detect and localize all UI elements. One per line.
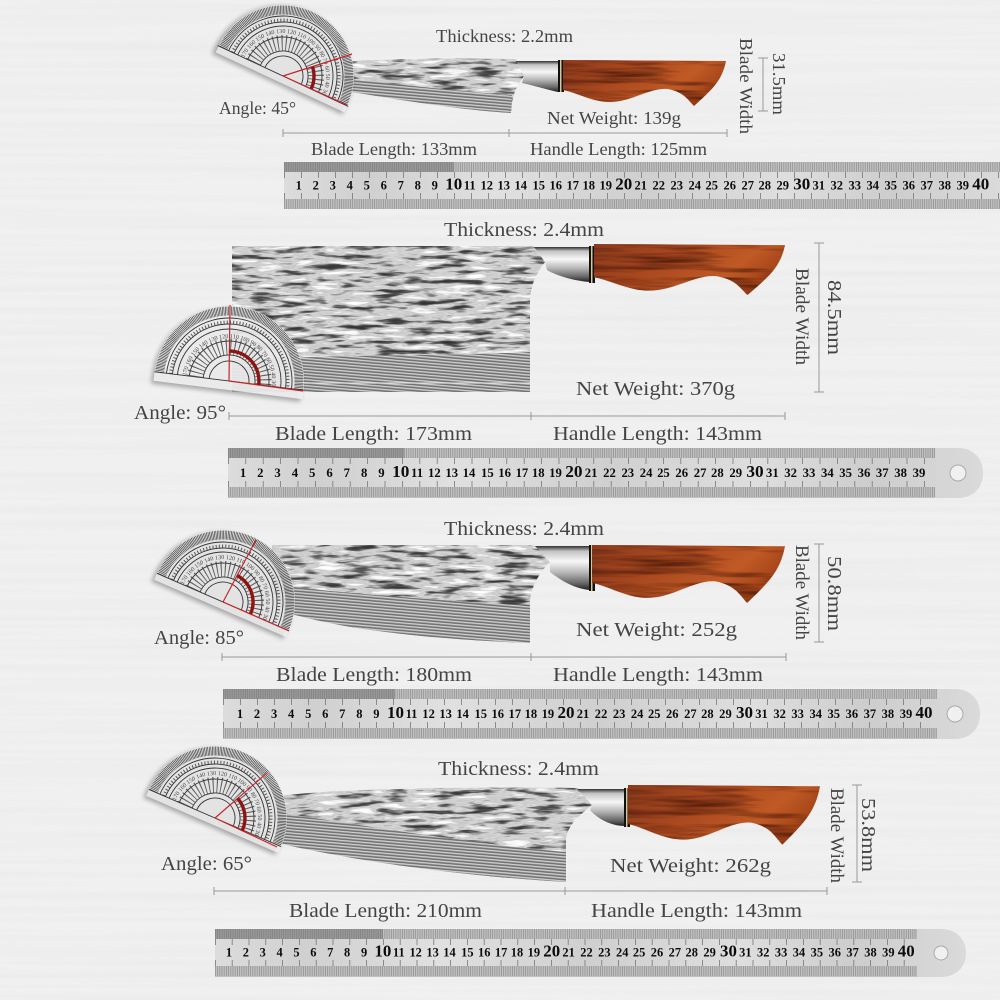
ruler 2: 5 bbox=[309, 466, 315, 480]
width value 1: 31.5mm bbox=[769, 53, 789, 115]
ruler 2: 10 bbox=[392, 462, 409, 481]
knife 3 handle bbox=[592, 545, 785, 603]
knife 2 bolster bbox=[534, 247, 590, 282]
width bracket 3 bbox=[814, 544, 824, 642]
ruler 4: 20 bbox=[543, 941, 560, 961]
ruler 3: 1 bbox=[237, 707, 243, 721]
protractor 4 bbox=[142, 746, 287, 856]
net weight label 3: Net Weight: 252g bbox=[576, 619, 737, 641]
knife 3 bolster bbox=[535, 546, 590, 590]
ruler 3: 37 bbox=[864, 707, 876, 721]
ruler 4: 32 bbox=[757, 945, 769, 960]
ruler 1: 36 bbox=[902, 178, 915, 192]
blade length label 4: Blade Length: 210mm bbox=[289, 900, 482, 922]
ruler 3: 29 bbox=[719, 707, 732, 721]
ruler 4: 7 bbox=[327, 945, 333, 960]
ruler 2: 34 bbox=[821, 466, 834, 480]
ruler 3: 26 bbox=[666, 707, 679, 721]
ruler 4 bbox=[215, 929, 966, 977]
ruler 2: 11 bbox=[411, 466, 423, 480]
ruler 2: 4 bbox=[292, 466, 299, 480]
ruler 2: 31 bbox=[766, 466, 779, 480]
ruler 3: 10 bbox=[387, 703, 404, 722]
ruler 4: 25 bbox=[633, 945, 645, 960]
ruler 1: 16 bbox=[549, 178, 562, 192]
ruler 1: 5 bbox=[364, 178, 370, 192]
ruler 2: 3 bbox=[274, 466, 281, 480]
thickness label 1: Thickness: 2.2mm bbox=[436, 26, 573, 46]
ruler 4: 2 bbox=[243, 945, 249, 960]
knife 2 blade bbox=[232, 246, 545, 392]
ruler 2: 20 bbox=[565, 462, 582, 481]
ruler 1: 12 bbox=[480, 178, 493, 192]
ruler 1: 7 bbox=[398, 178, 404, 192]
ruler 3: 14 bbox=[456, 707, 470, 721]
knife 1 collar bbox=[558, 60, 564, 92]
ruler 4: 39 bbox=[882, 945, 895, 960]
ruler 4: 30 bbox=[720, 941, 737, 961]
width bracket 2 bbox=[814, 243, 824, 392]
ruler 4: 8 bbox=[344, 945, 350, 960]
ruler 3: 8 bbox=[356, 707, 362, 721]
ruler 3: 30 bbox=[736, 703, 753, 722]
panel: knife 4 chef bbox=[142, 746, 879, 922]
ruler 1: 38 bbox=[938, 178, 951, 192]
ruler 4: 22 bbox=[580, 945, 593, 960]
blade width label 1: Blade Width bbox=[736, 38, 756, 134]
ruler 2: 7 bbox=[344, 466, 350, 480]
ruler 1: 2 bbox=[313, 178, 319, 192]
ruler 2: 1 bbox=[240, 466, 246, 480]
handle length label 1: Handle Length: 125mm bbox=[530, 139, 707, 159]
ruler 4: 18 bbox=[511, 945, 523, 960]
knife 2 handle bbox=[594, 244, 785, 295]
ruler 1: 4 bbox=[347, 178, 354, 192]
length dimension line 4 bbox=[214, 887, 827, 895]
ruler 1: 25 bbox=[705, 178, 718, 192]
ruler 4: 37 bbox=[846, 945, 859, 960]
ruler 1: 8 bbox=[415, 178, 421, 192]
blade length label 3: Blade Length: 180mm bbox=[276, 664, 472, 686]
ruler 2: 9 bbox=[378, 466, 385, 480]
ruler 2: 35 bbox=[839, 466, 852, 480]
ruler 3: 13 bbox=[439, 707, 452, 721]
ruler 4: 27 bbox=[669, 945, 681, 960]
ruler 4: 24 bbox=[616, 945, 628, 960]
ruler 4: 31 bbox=[739, 945, 752, 960]
ruler 3: 23 bbox=[613, 707, 625, 721]
ruler 1: 21 bbox=[634, 178, 647, 192]
ruler 2: 8 bbox=[361, 466, 367, 480]
ruler 4: 10 bbox=[374, 941, 391, 961]
ruler 2: 22 bbox=[603, 466, 616, 480]
ruler 3: 20 bbox=[557, 703, 574, 722]
ruler 2: 25 bbox=[657, 466, 670, 480]
thickness label 3: Thickness: 2.4mm bbox=[444, 518, 604, 540]
width bracket 4 bbox=[852, 785, 862, 882]
ruler 4: 38 bbox=[864, 945, 877, 960]
ruler 1: 23 bbox=[670, 178, 683, 192]
knife 3 blade bbox=[272, 545, 550, 643]
ruler 3: 19 bbox=[542, 707, 554, 721]
ruler 4: 33 bbox=[775, 945, 787, 960]
ruler 4: 36 bbox=[829, 945, 841, 960]
ruler 3: 38 bbox=[882, 707, 894, 721]
ruler 3: 12 bbox=[422, 707, 435, 721]
ruler 3: 3 bbox=[271, 707, 277, 721]
ruler 4: 6 bbox=[310, 945, 317, 960]
ruler 4: 9 bbox=[361, 945, 367, 960]
ruler 2: 37 bbox=[876, 466, 889, 480]
knife 4 bolster bbox=[577, 789, 625, 826]
ruler 1: 27 bbox=[741, 178, 754, 192]
ruler 4: 15 bbox=[461, 945, 474, 960]
ruler 2: 38 bbox=[894, 466, 907, 480]
ruler 4: 12 bbox=[409, 945, 422, 960]
ruler 3: 11 bbox=[406, 707, 417, 721]
ruler 2: 15 bbox=[481, 466, 494, 480]
knife 1 bolster bbox=[516, 61, 558, 92]
ruler 4: 28 bbox=[686, 945, 698, 960]
knife 3 collar bbox=[589, 545, 595, 591]
ruler 1: 40 bbox=[972, 174, 989, 194]
length dimension line 1 bbox=[283, 129, 727, 137]
ruler 3: 17 bbox=[509, 707, 521, 721]
protractor 2: 170 160 150 140 130 120 110 100 90 80 70 60 50 40 30 20 10 bbox=[182, 334, 276, 386]
ruler 2: 2 bbox=[257, 466, 263, 480]
ruler 3: 9 bbox=[373, 707, 380, 721]
ruler 1 bbox=[284, 162, 1000, 209]
length dimension line 2 bbox=[229, 412, 785, 420]
ruler 1: 17 bbox=[566, 178, 579, 192]
ruler 4: 13 bbox=[426, 945, 439, 960]
ruler 1: 10 bbox=[445, 174, 462, 194]
ruler 3: 36 bbox=[846, 707, 858, 721]
ruler 3: 32 bbox=[773, 707, 786, 721]
ruler 4: 35 bbox=[811, 945, 823, 960]
ruler 2 bbox=[228, 448, 983, 498]
ruler 3: 35 bbox=[828, 707, 840, 721]
blade length label 2: Blade Length: 173mm bbox=[275, 423, 472, 445]
net weight label 2: Net Weight: 370g bbox=[576, 378, 735, 400]
blade width label 4: Blade Width bbox=[826, 788, 847, 883]
knife 4 handle bbox=[628, 785, 820, 845]
ruler 4: 1 bbox=[226, 945, 232, 960]
width value 4: 53.8mm bbox=[857, 798, 879, 872]
ruler 3: 33 bbox=[791, 707, 804, 721]
ruler 1: 19 bbox=[599, 178, 612, 192]
ruler 3: 16 bbox=[492, 707, 504, 721]
ruler 2: 29 bbox=[729, 466, 742, 480]
ruler 2: 18 bbox=[532, 466, 545, 480]
ruler 1: 39 bbox=[956, 178, 969, 192]
ruler 3: 18 bbox=[525, 707, 537, 721]
panel: knife 1 paring bbox=[210, 3, 789, 159]
protractor 3: 170 160 150 140 130 120 110 100 90 80 70 60 50 40 30 20 10 bbox=[180, 555, 270, 620]
handle length label 3: Handle Length: 143mm bbox=[553, 664, 763, 686]
ruler 3: 4 bbox=[288, 707, 295, 721]
width value 2: 84.5mm bbox=[823, 280, 845, 355]
knife 1 blade bbox=[340, 58, 524, 113]
ruler 3: 7 bbox=[339, 707, 345, 721]
handle length label 4: Handle Length: 143mm bbox=[591, 900, 802, 922]
ruler 4: 11 bbox=[393, 945, 405, 960]
ruler 3: 5 bbox=[305, 707, 311, 721]
blade width label 3: Blade Width bbox=[791, 545, 812, 640]
ruler 2: 36 bbox=[858, 466, 870, 480]
ruler 4: 34 bbox=[793, 945, 805, 960]
ruler 1: 1 bbox=[296, 178, 302, 192]
ruler 1: 14 bbox=[514, 178, 528, 192]
ruler 2: 39 bbox=[913, 466, 925, 480]
ruler 3: 2 bbox=[254, 707, 260, 721]
knife 2 collar bbox=[589, 246, 595, 283]
protractor 3 bbox=[150, 530, 295, 640]
ruler 3 bbox=[223, 689, 980, 739]
ruler 1: 35 bbox=[884, 178, 897, 192]
ruler 1: 11 bbox=[464, 178, 476, 192]
ruler 1: 20 bbox=[615, 174, 632, 194]
ruler 2: 23 bbox=[621, 466, 634, 480]
ruler 4: 26 bbox=[651, 945, 663, 960]
ruler 2: 17 bbox=[516, 466, 528, 480]
thickness label 2: Thickness: 2.4mm bbox=[444, 219, 604, 241]
ruler 4: 23 bbox=[598, 945, 611, 960]
width bracket 1 bbox=[758, 58, 768, 111]
ruler 1: 33 bbox=[848, 178, 861, 192]
ruler 3: 27 bbox=[684, 707, 697, 721]
protractor 1: 170 160 150 140 130 120 110 100 90 80 70 60 50 40 30 20 10 bbox=[241, 29, 330, 95]
ruler 1: 15 bbox=[532, 178, 545, 192]
ruler 2: 14 bbox=[463, 466, 476, 480]
ruler 1: 30 bbox=[793, 174, 810, 194]
angle label 4: Angle: 65° bbox=[161, 853, 252, 875]
blade length label 1: Blade Length: 133mm bbox=[311, 139, 477, 159]
ruler 4: 5 bbox=[293, 945, 300, 960]
ruler 2: 26 bbox=[675, 466, 688, 480]
ruler 3: 21 bbox=[577, 707, 589, 721]
ruler 2: 24 bbox=[640, 466, 653, 480]
ruler 4: 4 bbox=[277, 945, 283, 960]
ruler 4: 40 bbox=[898, 941, 915, 961]
width value 3: 50.8mm bbox=[823, 556, 845, 631]
ruler 2: 6 bbox=[326, 466, 333, 480]
ruler 1: 31 bbox=[812, 178, 825, 192]
blade width label 2: Blade Width bbox=[791, 268, 812, 365]
ruler 4: 3 bbox=[260, 945, 266, 960]
panel: knife 3 santoku bbox=[150, 518, 845, 686]
ruler 3: 39 bbox=[900, 707, 912, 721]
ruler 1: 29 bbox=[776, 178, 789, 192]
length dimension line 3 bbox=[222, 653, 786, 661]
ruler 4: 19 bbox=[528, 945, 540, 960]
thickness label 4: Thickness: 2.4mm bbox=[438, 758, 599, 780]
ruler 2: 19 bbox=[549, 466, 562, 480]
ruler 2: 13 bbox=[445, 466, 458, 480]
ruler 1: 28 bbox=[758, 178, 771, 192]
ruler 4: 29 bbox=[703, 945, 716, 960]
ruler 1: 34 bbox=[866, 178, 880, 192]
ruler 4: 16 bbox=[478, 945, 490, 960]
knife 4 collar bbox=[624, 788, 630, 827]
ruler 3: 34 bbox=[809, 707, 823, 721]
ruler 3: 40 bbox=[916, 703, 933, 722]
net weight label 1: Net Weight: 139g bbox=[547, 108, 681, 128]
protractor 2 bbox=[149, 305, 304, 404]
ruler 1: 6 bbox=[381, 178, 387, 192]
knife 4 blade bbox=[278, 788, 592, 882]
ruler 2: 12 bbox=[428, 466, 441, 480]
ruler 2: 27 bbox=[694, 466, 706, 480]
ruler 1: 18 bbox=[582, 178, 595, 192]
net weight label 4: Net Weight: 262g bbox=[610, 855, 771, 877]
ruler 3: 31 bbox=[755, 707, 768, 721]
ruler 3: 28 bbox=[701, 707, 714, 721]
ruler 1: 37 bbox=[920, 178, 933, 192]
ruler 2: 30 bbox=[746, 462, 764, 481]
ruler 3: 15 bbox=[474, 707, 487, 721]
protractor 4: 170 160 150 140 130 120 110 100 90 80 70 60 50 40 30 20 10 bbox=[172, 771, 262, 836]
ruler 2: 32 bbox=[784, 466, 797, 480]
ruler 1: 9 bbox=[432, 178, 438, 192]
ruler 3: 24 bbox=[631, 707, 644, 721]
ruler 2: 33 bbox=[803, 466, 815, 480]
ruler 4: 17 bbox=[495, 945, 507, 960]
ruler 1: 13 bbox=[497, 178, 510, 192]
ruler 3: 6 bbox=[322, 707, 328, 721]
ruler 4: 21 bbox=[562, 945, 575, 960]
protractor 1 bbox=[210, 3, 354, 116]
ruler 2: 28 bbox=[711, 466, 724, 480]
angle label 3: Angle: 85° bbox=[154, 627, 244, 649]
ruler 2: 16 bbox=[498, 466, 511, 480]
ruler 1: 24 bbox=[688, 178, 702, 192]
ruler 3: 22 bbox=[595, 707, 607, 721]
ruler 4: 14 bbox=[443, 945, 456, 960]
ruler 3: 25 bbox=[648, 707, 660, 721]
handle length label 2: Handle Length: 143mm bbox=[553, 423, 762, 445]
ruler 2: 21 bbox=[585, 466, 598, 480]
ruler 1: 32 bbox=[830, 178, 843, 192]
knife 1 handle bbox=[563, 60, 726, 106]
panel: knife 2 cleaver bbox=[134, 219, 845, 445]
angle label 2: Angle: 95° bbox=[134, 402, 226, 424]
ruler 1: 26 bbox=[723, 178, 736, 192]
ruler 1: 22 bbox=[652, 178, 665, 192]
ruler 1: 3 bbox=[330, 178, 336, 192]
angle label 1: Angle: 45° bbox=[219, 98, 296, 118]
